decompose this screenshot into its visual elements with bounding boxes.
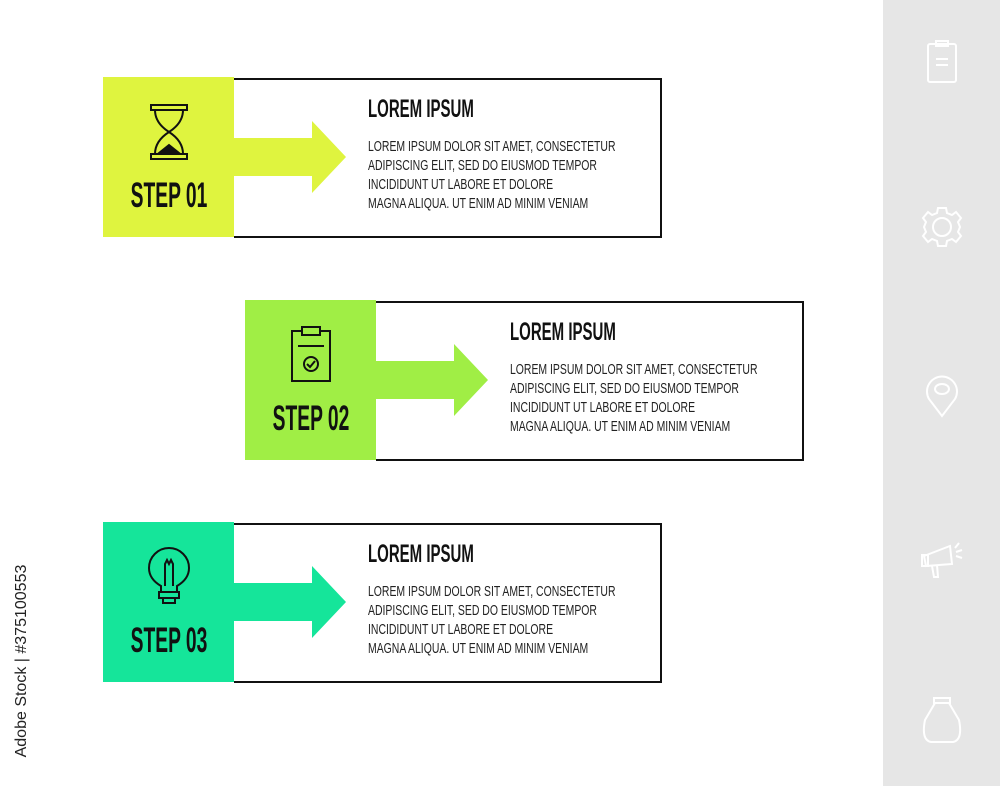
step 3 frame xyxy=(234,523,662,683)
step 2 body text xyxy=(510,362,758,435)
icon: hourglass xyxy=(150,104,188,160)
step 1 xyxy=(103,77,662,238)
step 2 frame xyxy=(376,301,804,461)
icon: gear xyxy=(922,207,962,247)
step 2 xyxy=(245,300,804,461)
step 3 body text: ADIPISCING ELIT, SED DO EIUSMOD TEMPOR xyxy=(368,603,597,619)
step 3 body text xyxy=(368,584,616,657)
step 1 arrow xyxy=(234,121,346,193)
step 1 colored square xyxy=(103,77,234,237)
step 2 body text: MAGNA ALIQUA. UT ENIM AD MINIM VENIAM xyxy=(510,419,730,435)
step 1 frame xyxy=(234,78,662,238)
step 3 body text: MAGNA ALIQUA. UT ENIM AD MINIM VENIAM xyxy=(368,641,588,657)
step 1 body text xyxy=(368,139,616,212)
icon: clipboard xyxy=(927,40,957,83)
icon: light bulb xyxy=(148,547,190,604)
side panel with icons xyxy=(883,0,1000,786)
step 2 body text: INCIDIDUNT UT LABORE ET DOLORE xyxy=(510,400,695,416)
step 1 body text: ADIPISCING ELIT, SED DO EIUSMOD TEMPOR xyxy=(368,158,597,174)
step 3 body text: INCIDIDUNT UT LABORE ET DOLORE xyxy=(368,622,553,638)
step 2 body text: ADIPISCING ELIT, SED DO EIUSMOD TEMPOR xyxy=(510,381,739,397)
icon: megaphone xyxy=(921,542,962,578)
step 1 label: STEP 01 xyxy=(130,176,207,215)
icon: location pin xyxy=(926,376,958,418)
step 1 body text: MAGNA ALIQUA. UT ENIM AD MINIM VENIAM xyxy=(368,196,588,212)
icon: sack xyxy=(923,697,961,743)
step 3 body text: LOREM IPSUM DOLOR SIT AMET, CONSECTETUR xyxy=(368,584,616,600)
step 3 label: STEP 03 xyxy=(130,621,207,660)
step 2 colored square xyxy=(245,300,376,460)
step 3 colored square xyxy=(103,522,234,682)
step 3 arrow xyxy=(234,566,346,638)
step 2 body text: LOREM IPSUM DOLOR SIT AMET, CONSECTETUR xyxy=(510,362,758,378)
step 2 arrow xyxy=(376,344,488,416)
step 2 title: LOREM IPSUM xyxy=(510,318,616,346)
step 1 body text: LOREM IPSUM DOLOR SIT AMET, CONSECTETUR xyxy=(368,139,616,155)
step 3 title: LOREM IPSUM xyxy=(368,540,474,568)
icon: clipboard check xyxy=(291,326,331,382)
step 1 body text: INCIDIDUNT UT LABORE ET DOLORE xyxy=(368,177,553,193)
step 3 xyxy=(103,522,662,683)
watermark id text: Adobe Stock | #375100553 xyxy=(13,565,30,757)
step 1 title: LOREM IPSUM xyxy=(368,95,474,123)
step 2 label: STEP 02 xyxy=(272,399,349,438)
